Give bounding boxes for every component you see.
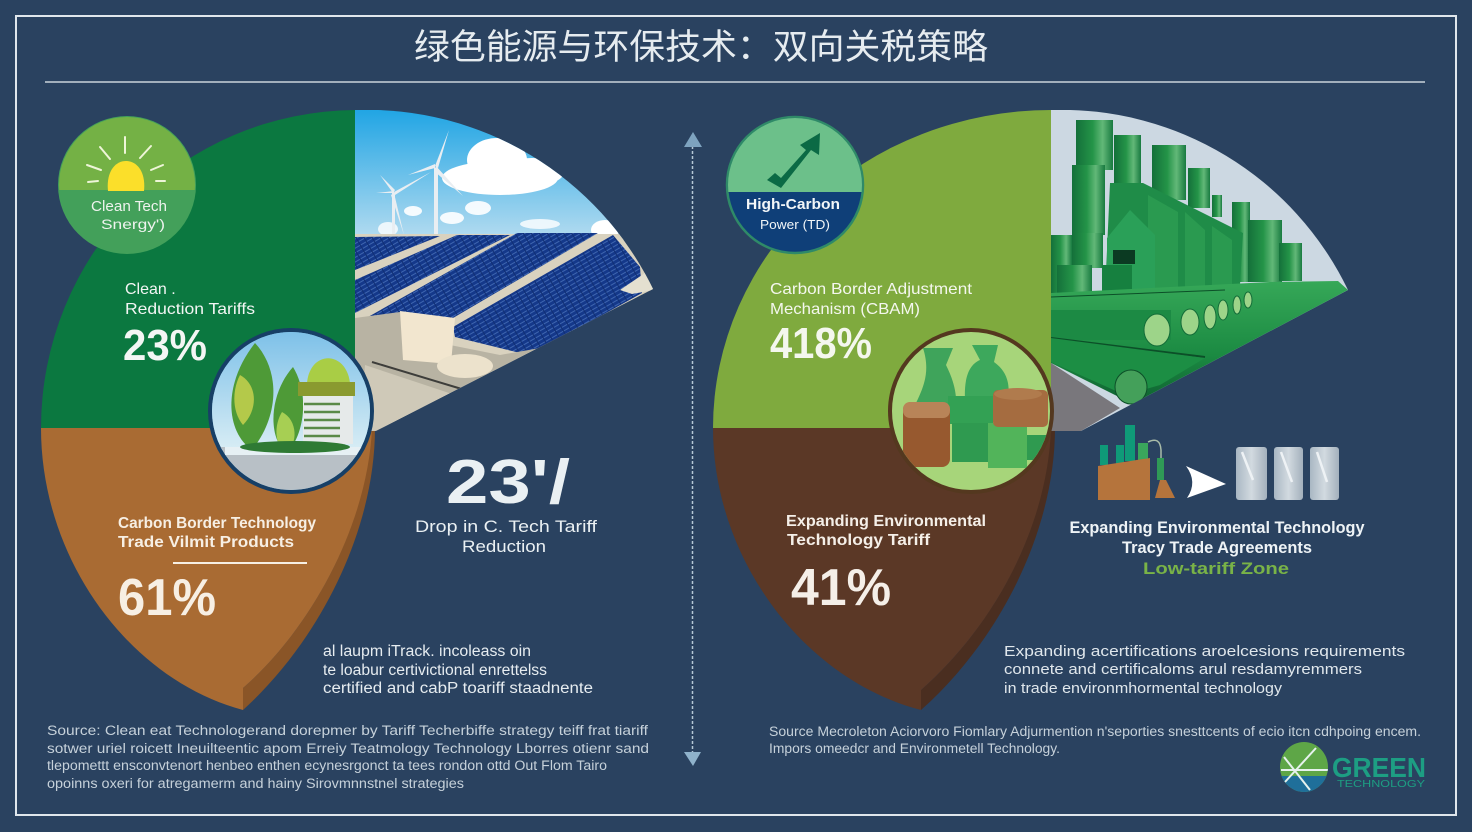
text block: expanding environmental technology agreements: Tracy Trade Agreements — [1122, 538, 1312, 557]
text: expanding environmental technology tariff: Expanding Environmental — [786, 513, 986, 530]
green segment — [41, 110, 355, 428]
text: expanding environmental technology tariff — [786, 513, 986, 617]
text block: right source: Impors omeedcr and Environmetell Technology. — [769, 741, 1060, 756]
photo: solar panels and wind turbines — [355, 110, 655, 431]
icon: sun — [87, 137, 165, 191]
text block: left note: al laupm iTrack. incoleass oin — [323, 643, 531, 660]
text block: expanding environmental technology agreements: Low-tariff Zone — [1143, 559, 1289, 578]
panel: left clean tech pie — [41, 110, 655, 710]
text: carbon border technology — [118, 515, 316, 627]
text block: left source: opoinns oxeri for atregamerm and hainy Sirovmnnstnel strategies — [47, 776, 464, 791]
arrow: white — [1186, 466, 1226, 498]
text block: expanding environmental technology agreements: Expanding Environmental Technology — [1070, 518, 1365, 537]
callout: 23 percent tariff drop: Drop in C. Tech Tariff — [415, 517, 597, 536]
inset circle: green and brown containers — [890, 330, 1052, 492]
dark brown side face — [921, 428, 1055, 710]
text block: left source: sotwer uriel roicett Ineuilteentic apom Erreiy Teatmology Technology Lborres otienr sand — [47, 741, 649, 756]
text block: right note: connete and certificaloms arul resdamyremmers — [1004, 661, 1362, 678]
panel: right carbon pie — [713, 110, 1351, 710]
light green segment — [713, 110, 1051, 428]
text block: left note: certified and cabP toariff staadnente — [323, 680, 593, 697]
badge: high carbon power — [727, 116, 863, 253]
icon: rising arrow — [767, 133, 820, 188]
text block: expanding environmental technology agreements — [1070, 518, 1365, 578]
dark brown segment — [713, 428, 1051, 710]
badge: high carbon power: Power (TD) — [760, 217, 830, 232]
text: carbon border adjustment mechanism: Carbon Border Adjustment — [770, 281, 973, 298]
icon: brown factory — [1098, 425, 1175, 500]
text: carbon border adjustment mechanism: Mechanism (CBAM) — [770, 301, 920, 318]
brown segment — [41, 428, 372, 710]
logo: green technology: TECHNOLOGY — [1337, 779, 1425, 790]
icon: factory to clean cylinders — [1098, 425, 1339, 500]
text block: right source: Source Mecroleton Aciorvoro Fiomlary Adjurmention n'seporties snesttcents of ecio itcn cdhpoing encem. — [769, 724, 1421, 739]
text block: right source — [769, 724, 1421, 756]
text block: left source — [47, 723, 649, 791]
inset circle: leaves and battery — [210, 330, 372, 495]
badge: high carbon power: High-Carbon — [746, 196, 840, 213]
text: clean reduction tariffs: 23% — [123, 321, 207, 370]
text: carbon border technology: Trade Vilmit Products — [118, 534, 294, 551]
badge: clean tech sun: Snergy') — [101, 216, 165, 232]
icon: silver cylinders — [1236, 447, 1339, 500]
badge: clean tech sun: Clean Tech — [91, 198, 167, 215]
text: clean reduction tariffs: Reduction Tariffs — [125, 301, 255, 318]
text: carbon border technology: 61% — [118, 569, 216, 627]
photo: green industrial plant — [1051, 110, 1351, 432]
logo: green technology — [1278, 742, 1426, 794]
text: clean reduction tariffs — [123, 281, 255, 370]
badge: clean tech sun — [58, 116, 198, 254]
text: expanding environmental technology tariff: 41% — [791, 559, 891, 617]
text block: right note: in trade environmhormental technology — [1004, 680, 1283, 697]
brown segment side face — [243, 428, 375, 710]
arrow: central double-headed divider — [684, 132, 702, 766]
text block: left note — [323, 643, 593, 697]
callout: 23 percent tariff drop: Reduction — [462, 537, 546, 556]
text block: left source: tlepomettt ensconvtenort henbeo enthen ecynesrgonct ta tees rondon ottd Out Flom Tairo — [47, 758, 607, 773]
text: clean reduction tariffs: Clean . — [125, 281, 176, 298]
text: carbon border technology: Carbon Border Technology — [118, 515, 316, 532]
text: carbon border adjustment mechanism — [770, 281, 973, 368]
logo: green technology: GREEN — [1332, 752, 1426, 783]
text block: right note — [1004, 643, 1405, 697]
text block: right note: Expanding acertifications aroelcesions requirements — [1004, 643, 1405, 660]
text block: left source: Source: Clean eat Technologerand dorepmer by Tariff Techerbiffe strategy teiff frat tiariff — [47, 723, 648, 738]
title: 绿色能源与环保技术：双向关税策略 — [414, 28, 988, 67]
text: expanding environmental technology tariff: Technology Tariff — [787, 532, 931, 549]
callout: 23 percent tariff drop — [415, 448, 597, 556]
callout: 23 percent tariff drop: 23'/ — [446, 448, 570, 517]
text: carbon border adjustment mechanism: 418% — [770, 319, 872, 368]
text block: left note: te loabur certivictional enrettelss — [323, 662, 547, 679]
